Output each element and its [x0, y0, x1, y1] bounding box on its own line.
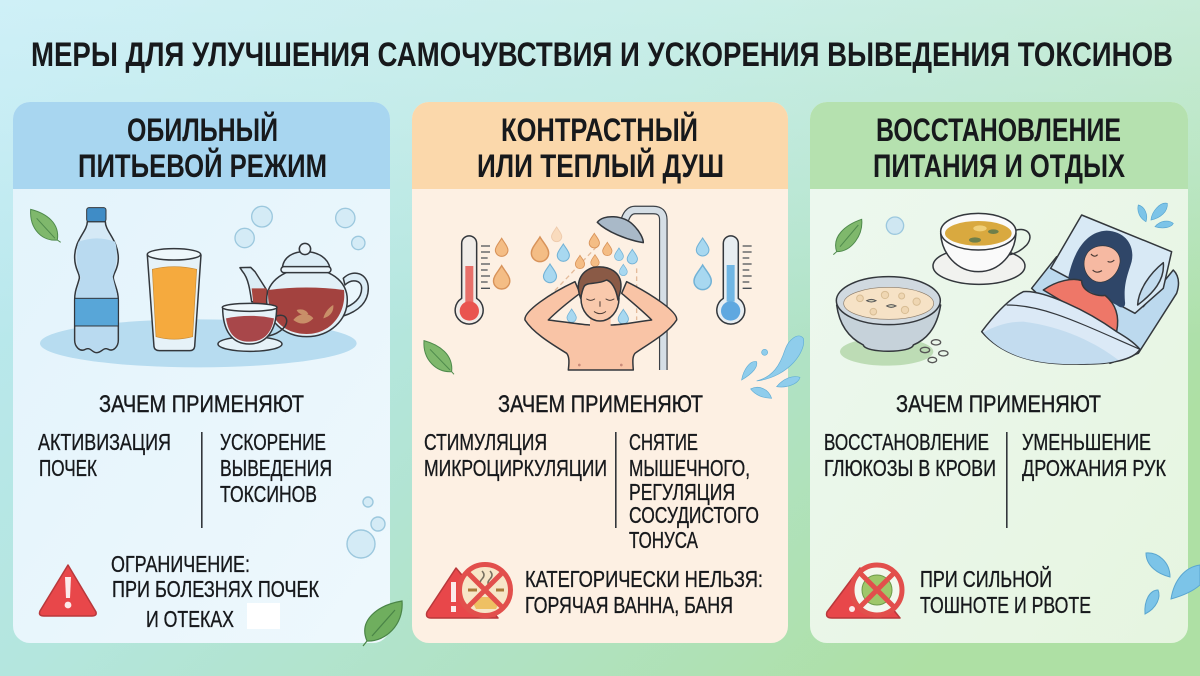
cool drops [543, 238, 711, 324]
icon: sleeping woman in bed [982, 215, 1179, 364]
heading: nutrition: ПИТАНИЯ И ОТДЫХ [873, 148, 1126, 184]
text: glucose recovery: ВОССТАНОВЛЕНИЕ [824, 429, 989, 455]
icon: shower pipe [625, 210, 663, 370]
bubbles lower [347, 497, 385, 558]
text: nausea and vomiting: ПРИ СИЛЬНОЙ [920, 565, 1052, 592]
icon: no hot bath warning [426, 564, 510, 618]
heading: drinking regime: ОБИЛЬНЫЙ [127, 112, 278, 148]
blanket [982, 292, 1140, 364]
icon: leaf [31, 209, 61, 242]
text: nausea and vomiting [920, 565, 1091, 618]
panel body: drinking regime [13, 102, 390, 643]
spray dashes [552, 247, 637, 320]
man in shower [525, 267, 677, 370]
icon: leaf [833, 219, 862, 255]
panel header: shower [412, 102, 788, 189]
text: muscle relief: СОСУДИСТОГО [629, 502, 759, 528]
text: toxin removal [220, 429, 332, 507]
text: limitation [111, 551, 319, 632]
panel: nutrition and rest [810, 102, 1188, 643]
text: glucose recovery [824, 429, 996, 481]
subheading: why used: ЗАЧЕМ ПРИМЕНЯЮТ [99, 391, 304, 418]
heading: drinking regime [78, 112, 327, 184]
table shadow [40, 319, 357, 367]
illustration: food and rest [833, 203, 1179, 366]
text: limitation: И ОТЕКАХ [146, 606, 234, 632]
text: microcirculation [424, 429, 607, 481]
text: muscle relief: РЕГУЛЯЦИЯ [629, 479, 735, 505]
text: toxin removal: ВЫВЕДЕНИЯ [220, 455, 332, 481]
text: toxin removal: УСКОРЕНИЕ [220, 429, 326, 455]
icon: leaf [424, 341, 454, 374]
text: glucose recovery: ГЛЮКОЗЫ В КРОВИ [824, 455, 996, 481]
text: muscle relief: МЫШЕЧНОГО, [629, 455, 750, 481]
text: muscle relief: СНЯТИЕ [629, 429, 698, 455]
text: limitation: ПРИ БОЛЕЗНЯХ ПОЧЕК [112, 576, 319, 602]
icon: splash at panel corner [1145, 553, 1200, 614]
shirt [1043, 279, 1118, 332]
bubble [886, 217, 904, 234]
icon: glass of juice [147, 249, 201, 351]
text: nausea and vomiting: ТОШНОТЕ И РВОТЕ [920, 592, 1091, 618]
illustration: bottle, juice and tea [31, 206, 368, 367]
warm drops [493, 227, 612, 289]
text: microcirculation: МИКРОЦИРКУЛЯЦИИ [424, 455, 607, 481]
heading: shower [477, 112, 724, 184]
hair [578, 267, 621, 300]
text: limitation: ОГРАНИЧЕНИЕ: [111, 551, 250, 577]
panel: shower [412, 102, 804, 643]
panel: drinking regime [13, 102, 390, 643]
icon: cup of tea [218, 303, 287, 351]
icon: no food warning [827, 565, 902, 618]
heading: shower: ИЛИ ТЕПЛЫЙ ДУШ [477, 148, 724, 184]
panel header: nutrition [810, 102, 1188, 189]
subheading: why used: ЗАЧЕМ ПРИМЕНЯЮТ [498, 391, 703, 418]
text: kidney activation [38, 429, 171, 481]
icon: warning triangle [40, 565, 96, 616]
panel body: nutrition [810, 102, 1188, 643]
icon: cup of soup [933, 213, 1030, 284]
icon: leaf at panel corner [363, 601, 402, 646]
pillow [1051, 215, 1172, 313]
text: strictly forbidden: КАТЕГОРИЧЕСКИ НЕЛЬЗЯ: [525, 566, 763, 592]
text: muscle relief: ТОНУСА [629, 527, 698, 553]
head [590, 313, 611, 333]
text: strictly forbidden [525, 566, 763, 618]
face [587, 299, 614, 314]
bed [1032, 257, 1179, 363]
icon: hot thermometer [455, 236, 490, 324]
icon: bowl of porridge [836, 277, 948, 366]
text: toxin removal: ТОКСИНОВ [220, 481, 317, 507]
heading: nutrition [873, 112, 1126, 184]
icon: splash top [1138, 203, 1173, 228]
icon: water splash [742, 336, 804, 398]
text: microcirculation: СТИМУЛЯЦИЯ [424, 429, 547, 455]
heading: drinking regime: ПИТЬЕВОЙ РЕЖИМ [78, 148, 327, 184]
icon: cold thermometer [717, 236, 752, 324]
text: kidney activation: АКТИВИЗАЦИЯ [38, 429, 171, 455]
panel header: drinking regime [13, 102, 390, 189]
text: tremor reduction: УМЕНЬШЕНИЕ [1022, 429, 1151, 455]
text: tremor reduction: ДРОЖАНИЯ РУК [1022, 455, 1166, 481]
icon: shower head [597, 217, 643, 243]
panel body: shower [412, 102, 788, 643]
icon: teapot [240, 243, 368, 337]
text: tremor reduction [1022, 429, 1166, 481]
icon: water bottle [75, 208, 118, 353]
text: muscle relief [629, 429, 759, 553]
bubbles [235, 206, 365, 250]
body with raised arms [525, 282, 677, 370]
hair [1068, 231, 1132, 307]
face [1084, 246, 1120, 282]
heading: nutrition: ВОССТАНОВЛЕНИЕ [876, 112, 1121, 148]
subheading: why used: ЗАЧЕМ ПРИМЕНЯЮТ [896, 391, 1101, 418]
illustration: shower [424, 210, 804, 398]
text: kidney activation: ПОЧЕК [39, 455, 97, 481]
text: strictly forbidden: ГОРЯЧАЯ ВАННА, БАНЯ [525, 592, 733, 618]
heading: shower: КОНТРАСТНЫЙ [501, 112, 698, 148]
